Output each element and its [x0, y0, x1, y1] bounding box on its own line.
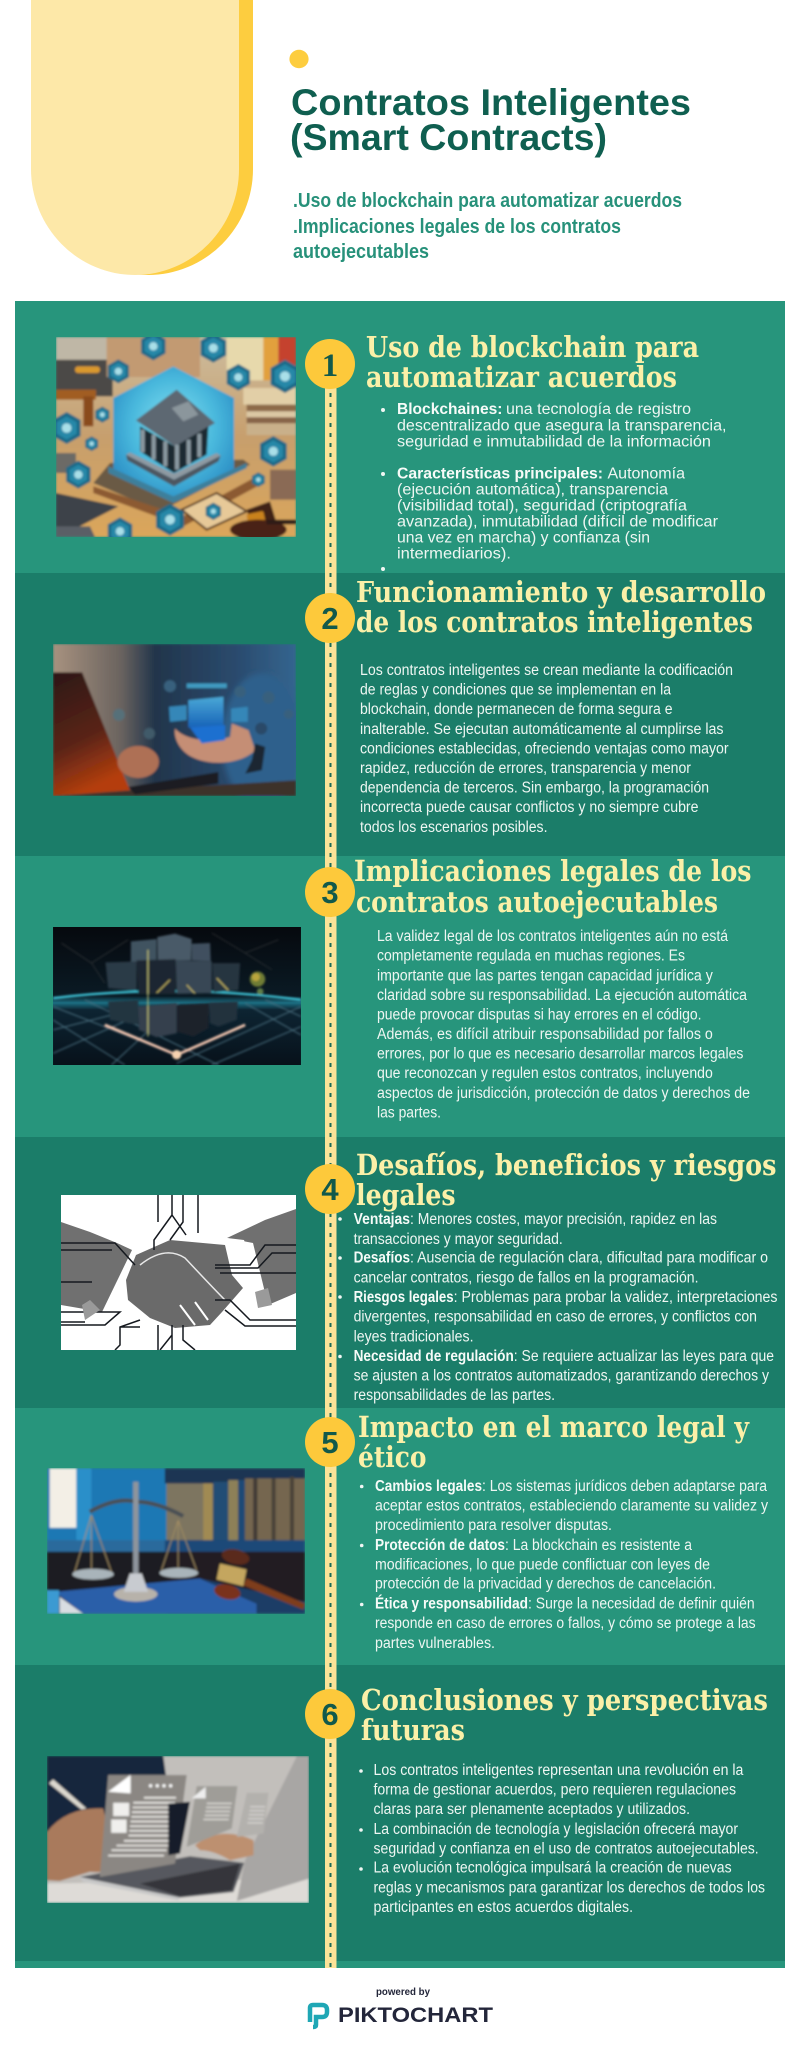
bullet list 5: : Los sistemas jurídicos deben adaptarse para [482, 1478, 767, 1495]
bullet list 5: Protección de datos [375, 1537, 505, 1554]
bullet list 4: leyes tradicionales. [354, 1329, 474, 1346]
number badge 1: 1 [322, 348, 338, 384]
bullet list 5: partes vulnerables. [375, 1635, 495, 1652]
subtitle [293, 190, 682, 263]
bullet list 5: procedimiento para resolver disputas. [375, 1517, 612, 1534]
paragraph 3: errores, por lo que es necesario desarrollar marcos legales [377, 1046, 744, 1063]
bullet list 6: Los contratos inteligentes representan una revolución en la [374, 1762, 744, 1779]
bullet list 1: Autonomía [608, 465, 685, 482]
bullet list 5: Ética y responsabilidad [375, 1596, 528, 1613]
heading 4 [356, 1148, 776, 1212]
bullet list 1: Características principales: [397, 465, 603, 482]
title [290, 82, 691, 158]
bullet list 5: : Surge la necesidad de definir quién [528, 1596, 755, 1613]
number badge 3 [305, 867, 355, 917]
bullet list 5: protección de la privacidad y derechos de cancelación. [375, 1576, 716, 1593]
bullet list 6: La combinación de tecnología y legislación ofrecerá mayor [374, 1821, 738, 1838]
heading 3: Implicaciones legales de los [354, 854, 752, 888]
bullet list 5: modificaciones, lo que puede conflictuar con leyes de [375, 1556, 710, 1573]
paragraph 2: condiciones establecidas, ofreciendo ventajas como mayor [360, 740, 729, 757]
heading 1: Uso de blockchain para [366, 330, 699, 364]
bullet list 6 [359, 1762, 765, 1916]
footer: powered by Piktochart: powered by [376, 1986, 430, 1998]
paragraph 2: blockchain, donde permanecen de forma segura e [360, 701, 672, 718]
bullet list 4: : Problemas para probar la validez, interpretaciones [454, 1289, 778, 1306]
bullet list 5: : La blockchain es resistente a [505, 1537, 692, 1554]
paragraph 3: aspectos de jurisdicción, protección de datos y derechos de [377, 1085, 750, 1102]
bullet list 1: una tecnología de registro [506, 401, 691, 418]
heading 4: legales [356, 1178, 456, 1212]
timeline spine [325, 380, 336, 1968]
panel: section 2 funcionamiento [15, 573, 785, 856]
panel: section 4 desafios [15, 1137, 785, 1408]
bullet list 1 [381, 401, 726, 571]
paragraph 3: claridad sobre su responsabilidad. La ejecución automática [377, 987, 747, 1004]
bullet list 4: se ajusten a los contratos automatizados, garantizando derechos y [354, 1368, 769, 1385]
bullet list 5: aceptar estos contratos, estableciendo claramente su validez y [375, 1498, 768, 1515]
paragraph 3: las partes. [377, 1104, 441, 1121]
icon: Piktochart logo [310, 2005, 327, 2027]
paragraph 3: que reconozcan y regulen estos contratos, incluyendo [377, 1065, 713, 1082]
bullet list 6: claras para ser plenamente aceptados y utilizados. [374, 1801, 690, 1818]
bullet list 1: intermediarios). [397, 545, 511, 562]
panel: section 6 conclusiones [15, 1665, 785, 1968]
paragraph 2: dependencia de terceros. Sin embargo, la programación [360, 780, 709, 797]
number badge 4: 4 [321, 1172, 339, 1207]
bullet list 4: Necesidad de regulación [354, 1348, 514, 1365]
paragraph 2: rapidez, reducción de errores, transparencia y menor [360, 760, 691, 777]
heading 6 [361, 1683, 768, 1747]
bullet list 4: : Se requiere actualizar las leyes para que [514, 1348, 774, 1365]
bullet list 1: descentralizado que asegura la transparencia, [397, 418, 726, 434]
heading 3: contratos autoejecutables [356, 885, 718, 919]
panel: section 3 implicaciones legales [15, 854, 785, 1137]
paragraph 2 [360, 662, 733, 836]
bullet list 1: Blockchaines: [397, 401, 502, 418]
heading 3 [354, 854, 752, 919]
image: blockchain building [56, 337, 296, 537]
title: (Smart Contracts) [290, 117, 607, 158]
paragraph 3 [377, 928, 750, 1121]
bullet list 4 [338, 1211, 778, 1404]
subtitle: .Implicaciones legales de los contratos [293, 216, 621, 238]
paragraph 2: inalterable. Se ejecutan automáticamente al cumplirse las [360, 721, 724, 738]
bullet list 4: responsabilidades de las partes. [354, 1387, 555, 1404]
paragraph 3: importante que las partes tengan capacidad jurídica y [377, 967, 713, 984]
heading 5: Impacto en el marco legal y [358, 1410, 750, 1444]
footer: powered by Piktochart: PIKTOCHART [338, 2004, 493, 2027]
number badge 5 [305, 1417, 355, 1467]
bullet list 1: avanzada), inmutabilidad (difícil de modificar [397, 513, 718, 530]
heading 1: automatizar acuerdos [366, 360, 677, 394]
bullet list 6: participantes en estos acuerdos digitales. [374, 1899, 633, 1916]
bullet list 6: reglas y mecanismos para garantizar los derechos de todos los [374, 1880, 765, 1897]
bullet list 5: Cambios legales [375, 1478, 482, 1495]
paragraph 2: todos los escenarios posibles. [360, 819, 548, 836]
bullet list 1: (ejecución automática), transparencia [397, 481, 668, 498]
bullet list 5 [360, 1478, 768, 1652]
bullet list 6: forma de gestionar acuerdos, pero requieren regulaciones [374, 1782, 736, 1799]
heading 6: futuras [361, 1713, 465, 1747]
bullet list 6: La evolución tecnológica impulsará la creación de nuevas [374, 1860, 732, 1877]
number badge 5: 5 [321, 1425, 339, 1460]
number badge 3: 3 [321, 875, 339, 910]
subtitle: autoejecutables [293, 241, 429, 263]
header decorative yellow arch [31, 0, 253, 275]
paragraph 3: La validez legal de los contratos inteligentes aún no está [377, 928, 728, 945]
bullet list 4: : Ausencia de regulación clara, dificultad para modificar o [410, 1250, 768, 1267]
paragraph 3: completamente regulada en muchas regiones. Es [377, 948, 685, 965]
bullet list 4: Ventajas [354, 1211, 410, 1228]
bullet list 1: una vez en marcha) y confianza (sin [397, 529, 650, 546]
number badge 4 [305, 1164, 355, 1214]
paragraph 2: Los contratos inteligentes se crean mediante la codificación [360, 662, 733, 679]
panel: section 5 impacto [15, 1408, 785, 1665]
number badge 6: 6 [321, 1697, 339, 1732]
image: hands with laptop and documents [47, 1756, 309, 1903]
header yellow dot [289, 50, 309, 68]
bullet list 4: cancelar contratos, riesgo de fallos en la programación. [354, 1270, 698, 1287]
bullet list 4: divergentes, responsabilidad en caso de errores, y conflictos con [354, 1309, 757, 1326]
heading 2 [356, 575, 766, 639]
paragraph 2: incorrecta puede causar conflictos y no siempre cubre [360, 799, 698, 816]
number badge 2 [305, 593, 355, 643]
bullet list 4: : Menores costes, mayor precisión, rapidez en las [410, 1211, 717, 1228]
image: digital handshake [61, 1195, 296, 1350]
bullet list 4: Desafíos [354, 1250, 410, 1267]
bullet list 1: (visibilidad total), seguridad (criptografía [397, 497, 687, 514]
bullet list 4: transacciones y mayor seguridad. [354, 1231, 563, 1248]
heading 1 [366, 330, 699, 394]
image: scales of justice and gavel [47, 1468, 305, 1614]
paragraph 3: Además, es difícil atribuir responsabilidad por fallos o [377, 1026, 713, 1043]
bullet list 1: seguridad e inmutabilidad de la información [397, 434, 711, 450]
number badge 6 [305, 1689, 355, 1739]
title: Contratos Inteligentes [291, 82, 691, 123]
image: hand holding blockchain cube [53, 644, 296, 796]
bullet list 5: responde en caso de errores o fallos, y cómo se protege a las [375, 1615, 756, 1632]
bullet list 6: seguridad y confianza en el uso de contratos autoejecutables. [374, 1840, 759, 1857]
footer: powered by Piktochart [310, 1986, 493, 2027]
paragraph 3: puede provocar disputas si hay errores en el código. [377, 1006, 702, 1023]
subtitle: .Uso de blockchain para automatizar acuerdos [293, 190, 682, 212]
heading 5 [358, 1410, 750, 1474]
bullet list 4: Riesgos legales [354, 1289, 454, 1306]
heading 5: ético [358, 1440, 426, 1474]
panel: section 1 blockchain [15, 301, 785, 573]
number badge 2: 2 [321, 601, 339, 636]
number badge 1 [305, 339, 355, 389]
paragraph 2: de reglas y condiciones que se implementan en la [360, 682, 671, 699]
image: glowing data cubes on grid [53, 927, 301, 1065]
